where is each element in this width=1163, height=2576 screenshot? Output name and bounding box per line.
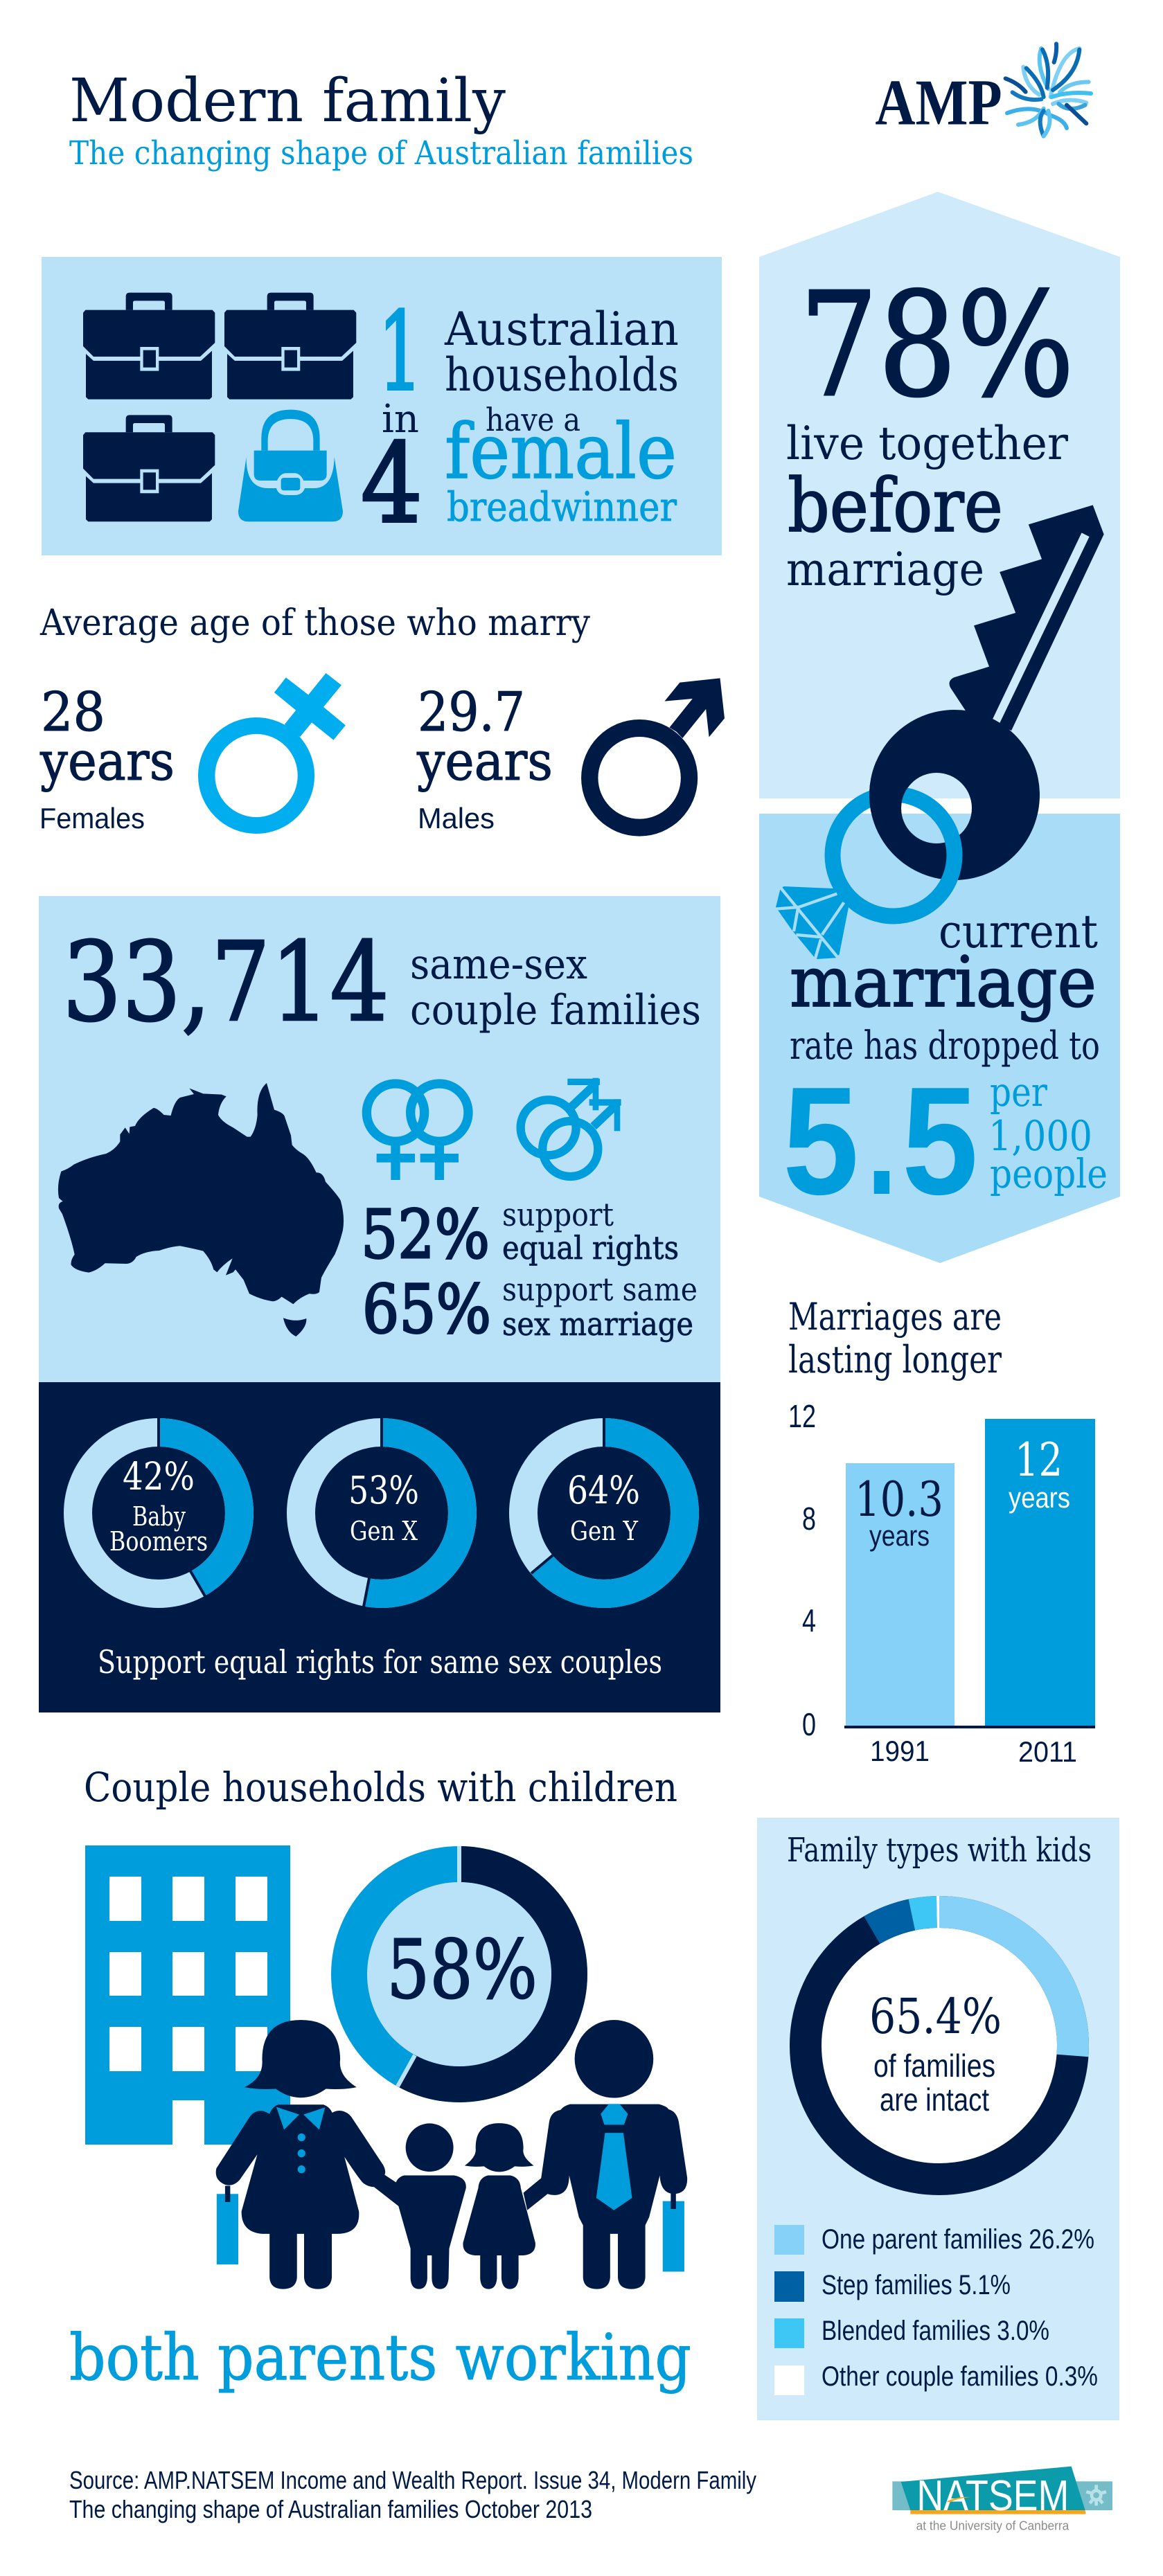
heading: both parents working: both parents working xyxy=(69,2320,691,2395)
legend: Other couple families 0.3% xyxy=(822,2361,1098,2392)
text: Australian households have a female breadwinner: Australian xyxy=(444,303,679,356)
text: 5.5 per 1,000 people: people xyxy=(990,1150,1108,1197)
heading: marriages lasting longer: Marriages are xyxy=(788,1295,1002,1339)
stat: male age: years xyxy=(416,731,553,793)
text: Australian households have a female breadwinner xyxy=(444,303,679,530)
text: 78%: 78% xyxy=(799,262,1074,429)
donut: Gen X 53% xyxy=(301,1418,463,1607)
stat: female age: Females xyxy=(39,802,145,834)
axis labels: 8 xyxy=(802,1501,816,1537)
stat: female age xyxy=(39,681,175,834)
icon: double male symbol xyxy=(521,1078,621,1177)
text: 1 in 4: 1 xyxy=(378,289,423,415)
legend: One parent families 26.2% xyxy=(822,2224,1094,2255)
text: 1 in 4 xyxy=(361,289,423,548)
donut: Baby Boomers 42%: Boomers xyxy=(109,1526,208,1557)
mother xyxy=(216,2020,399,2289)
heading: couple households: Couple households with children xyxy=(84,1764,677,1811)
text: Australian households have a female breadwinner: households xyxy=(445,348,679,402)
donut: Gen X 53%: 53% xyxy=(348,1468,419,1512)
panel: same-sex couples xyxy=(39,896,720,1382)
panel: support equal rights by generation xyxy=(39,1382,720,1712)
text: Australian households have a female breadwinner: female xyxy=(445,407,677,496)
stat: 52% support equal rights xyxy=(361,1196,679,1273)
title: Modern family xyxy=(69,66,506,136)
text: Australian households have a female breadwinner: breadwinner xyxy=(447,483,677,530)
donut: 58% both parents working xyxy=(331,1846,587,2102)
axis labels: 12 xyxy=(788,1398,816,1434)
text: 1 in 4: in xyxy=(382,397,419,442)
text: current marriage rate has dropped to xyxy=(790,905,1100,1068)
daughter xyxy=(463,2123,535,2289)
source note: Source: AMP.NATSEM Income and Wealth Report. Issue 34, Modern Family xyxy=(69,2466,756,2494)
text: live together before marriage: marriage xyxy=(786,543,984,596)
donut: Baby Boomers 42%: 42% xyxy=(123,1454,195,1499)
donut: Gen Y 64%: 64% xyxy=(567,1468,640,1512)
text: 5.5 per 1,000 people: 5 xyxy=(783,1055,859,1227)
stat: 52% support equal rights: support xyxy=(502,1196,614,1233)
donut: Gen Y 64% xyxy=(524,1418,684,1594)
heading: marriages lasting longer: lasting longer xyxy=(788,1338,1002,1381)
donut: Baby Boomers 42% xyxy=(78,1418,240,1596)
bar: 1991 xyxy=(846,1463,955,1767)
axis labels: 4 xyxy=(802,1602,816,1638)
stat: 65% support same sex marriage: sex marriage xyxy=(502,1305,693,1343)
bar: 2011: 2011 xyxy=(1018,1735,1077,1768)
stat: female age: years xyxy=(39,731,175,793)
illustration: family of four xyxy=(216,2020,687,2289)
text: 5.5 per 1,000 people: 1,000 xyxy=(988,1112,1092,1161)
donut: Gen Y 64%: Gen Y xyxy=(570,1516,639,1546)
stat: male age xyxy=(416,681,553,834)
subtitle: The changing shape of Australian families xyxy=(69,134,693,172)
source note: The changing shape of Australian families October 2013 xyxy=(69,2495,592,2523)
icon: double female symbol xyxy=(366,1084,468,1180)
AMP logo xyxy=(875,44,1091,138)
AMP logo: AMP xyxy=(875,66,1002,138)
bar chart: marriage duration xyxy=(788,1398,1095,1768)
stat: 33,714: 33,714 xyxy=(62,919,389,1046)
stat: 65% support same sex marriage: support same xyxy=(502,1271,698,1308)
father xyxy=(524,2020,687,2289)
map: Australia xyxy=(58,1083,344,1336)
donut chart: family types xyxy=(806,1912,1073,2179)
axis labels xyxy=(788,1398,816,1742)
text: live together before marriage: live together xyxy=(786,417,1068,470)
icon: key xyxy=(869,505,1104,880)
bar: 2011 xyxy=(985,1419,1095,1768)
donut chart: family types: of families xyxy=(873,2048,995,2084)
donut chart: family types: are intact xyxy=(880,2082,989,2118)
stat: male age: Males xyxy=(418,802,495,834)
donut: Gen X 53%: Gen X xyxy=(350,1516,418,1546)
text: live together before marriage: before xyxy=(788,463,1003,549)
legend xyxy=(774,2224,1098,2395)
NATSEM logo: at the University of Canberra xyxy=(916,2518,1069,2532)
heading: marriages lasting longer xyxy=(788,1295,1002,1381)
icon: office building xyxy=(85,1845,290,2145)
heading: average age: Average age of those who marry xyxy=(39,602,591,644)
donut: 58% both parents working: 58% xyxy=(387,1922,538,2017)
donut chart: family types: 65.4% xyxy=(869,1988,1002,2045)
bar: 1991: years xyxy=(869,1519,930,1552)
text: 1 in 4: 4 xyxy=(361,420,423,548)
bar: 1991: 1991 xyxy=(870,1735,930,1767)
son xyxy=(394,2123,466,2289)
stat: 52% support equal rights: equal rights xyxy=(502,1229,679,1267)
text: 5.5 per 1,000 people: 5 xyxy=(902,1055,978,1227)
text: 5.5 per 1,000 people: . xyxy=(867,1055,897,1227)
icon: female symbol xyxy=(198,673,346,834)
axis labels: 0 xyxy=(802,1706,816,1742)
source note xyxy=(69,2466,756,2523)
stat: 52% support equal rights: 52% xyxy=(361,1196,490,1273)
stat: female age: 28 xyxy=(41,681,105,744)
text: 5.5 per 1,000 people: per xyxy=(990,1068,1047,1116)
legend: Step families 5.1% xyxy=(822,2270,1011,2300)
text: same-sex couple families: couple families xyxy=(410,986,701,1035)
stat: 65% support same sex marriage: 65% xyxy=(362,1271,491,1348)
icon: ring with diamond xyxy=(776,762,963,959)
icon: male symbol xyxy=(581,678,725,837)
text: 5.5 per 1,000 people xyxy=(783,1055,1108,1227)
bar: 2011: years xyxy=(1009,1481,1070,1514)
panel: 1 in 4 female breadwinner xyxy=(42,257,722,555)
panel: 78% live together before marriage xyxy=(759,192,1120,798)
panel: marriage rate xyxy=(759,814,1120,1263)
caption: Support equal rights for same sex couples xyxy=(98,1643,662,1681)
stat: 65% support same sex marriage xyxy=(362,1271,698,1348)
text: live together before marriage xyxy=(786,417,1068,596)
bar: 2011: 12 xyxy=(1015,1433,1063,1487)
NATSEM logo xyxy=(892,2467,1112,2532)
icons: briefcases and handbag xyxy=(83,293,356,521)
bar: 1991: 10.3 xyxy=(855,1472,943,1528)
legend: Blended families 3.0% xyxy=(822,2316,1049,2346)
text: same-sex couple families: same-sex xyxy=(410,940,587,989)
NATSEM logo: NATSEM xyxy=(916,2472,1069,2520)
heading: Family types with kids xyxy=(787,1831,1092,1870)
text: current marriage rate has dropped to: marriage xyxy=(790,942,1097,1023)
text: current marriage rate has dropped to: current xyxy=(939,905,1098,958)
text: Australian households have a female breadwinner: have a xyxy=(486,401,580,438)
text: same-sex couple families xyxy=(410,940,701,1035)
donut: Baby Boomers 42%: Baby xyxy=(132,1501,186,1532)
panel: family types with kids xyxy=(757,1818,1119,2420)
stat: male age: 29.7 xyxy=(418,681,525,744)
